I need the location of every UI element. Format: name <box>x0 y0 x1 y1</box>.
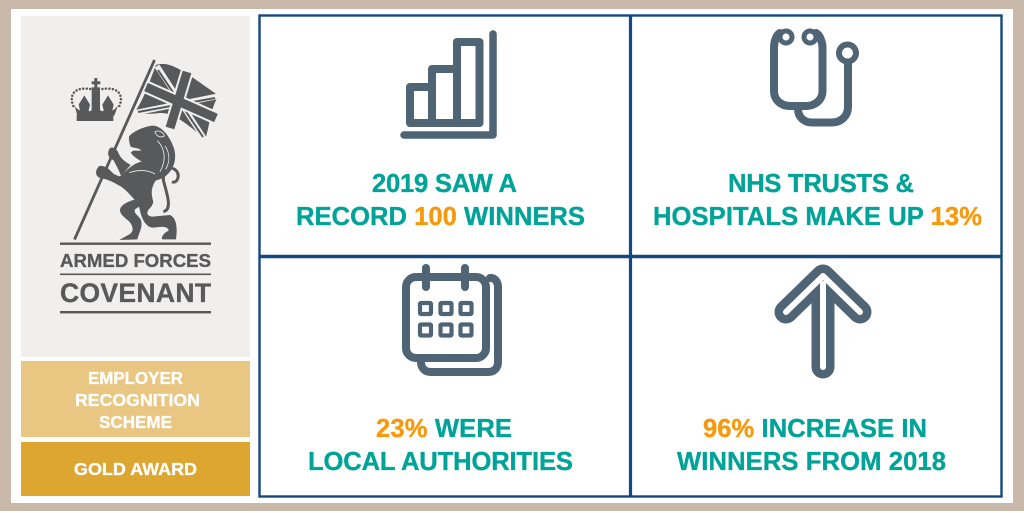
panel: armed forces covenant logo <box>21 16 250 357</box>
panel: record winners <box>296 34 585 231</box>
text: 96% increase in winners from 2018: WINNERS FROM 2018 <box>677 448 946 476</box>
icon: union flag <box>134 64 219 140</box>
logo text: covenant: COVENANT <box>60 278 211 308</box>
logo text: armed forces: ARMED FORCES <box>60 250 211 271</box>
text: 96% increase in winners from 2018 <box>677 415 946 476</box>
text: nhs trusts and hospitals make up 13%: NHS TRUSTS & <box>728 170 914 198</box>
panel: nhs trusts and hospitals <box>653 31 982 231</box>
panel: gold award: GOLD AWARD <box>74 459 197 479</box>
icon: up arrow <box>786 276 860 367</box>
logo rule: middle <box>60 274 211 275</box>
stat grid frame <box>259 15 1002 497</box>
text: nhs trusts and hospitals make up 13% <box>653 170 982 231</box>
text: 23% were local authorities: LOCAL AUTHORITIES <box>308 448 573 476</box>
text: 23% were local authorities <box>308 415 573 476</box>
icon: crown <box>72 78 121 121</box>
text: 96% increase in winners from 2018: 96% INCREASE IN <box>703 415 927 443</box>
panel: gold award <box>21 442 250 496</box>
icon: stethoscope <box>774 31 856 122</box>
icon: flag pole <box>74 60 154 240</box>
panel: employer recognition scheme <box>21 361 250 437</box>
panel: local authorities <box>308 268 573 476</box>
logo rule: bottom <box>60 311 211 313</box>
panel: increase in winners <box>677 276 946 476</box>
panel: employer recognition scheme: RECOGNITION <box>75 390 200 410</box>
text: 2019 saw a record 100 winners <box>296 170 585 231</box>
text: 23% were local authorities: 23% WERE <box>376 415 512 443</box>
panel: employer recognition scheme: SCHEME <box>99 412 172 432</box>
panel: employer recognition scheme: EMPLOYER <box>88 368 183 388</box>
text: nhs trusts and hospitals make up 13%: HOSPITALS MAKE UP 13% <box>653 203 982 231</box>
icon: bar chart <box>404 34 493 135</box>
text: 2019 saw a record 100 winners: RECORD 100 WINNERS <box>296 203 585 231</box>
text: 2019 saw a record 100 winners: 2019 SAW A <box>372 170 517 198</box>
icon: calendar <box>406 268 498 372</box>
icon: lion <box>96 126 178 240</box>
logo rule: top <box>60 242 211 245</box>
